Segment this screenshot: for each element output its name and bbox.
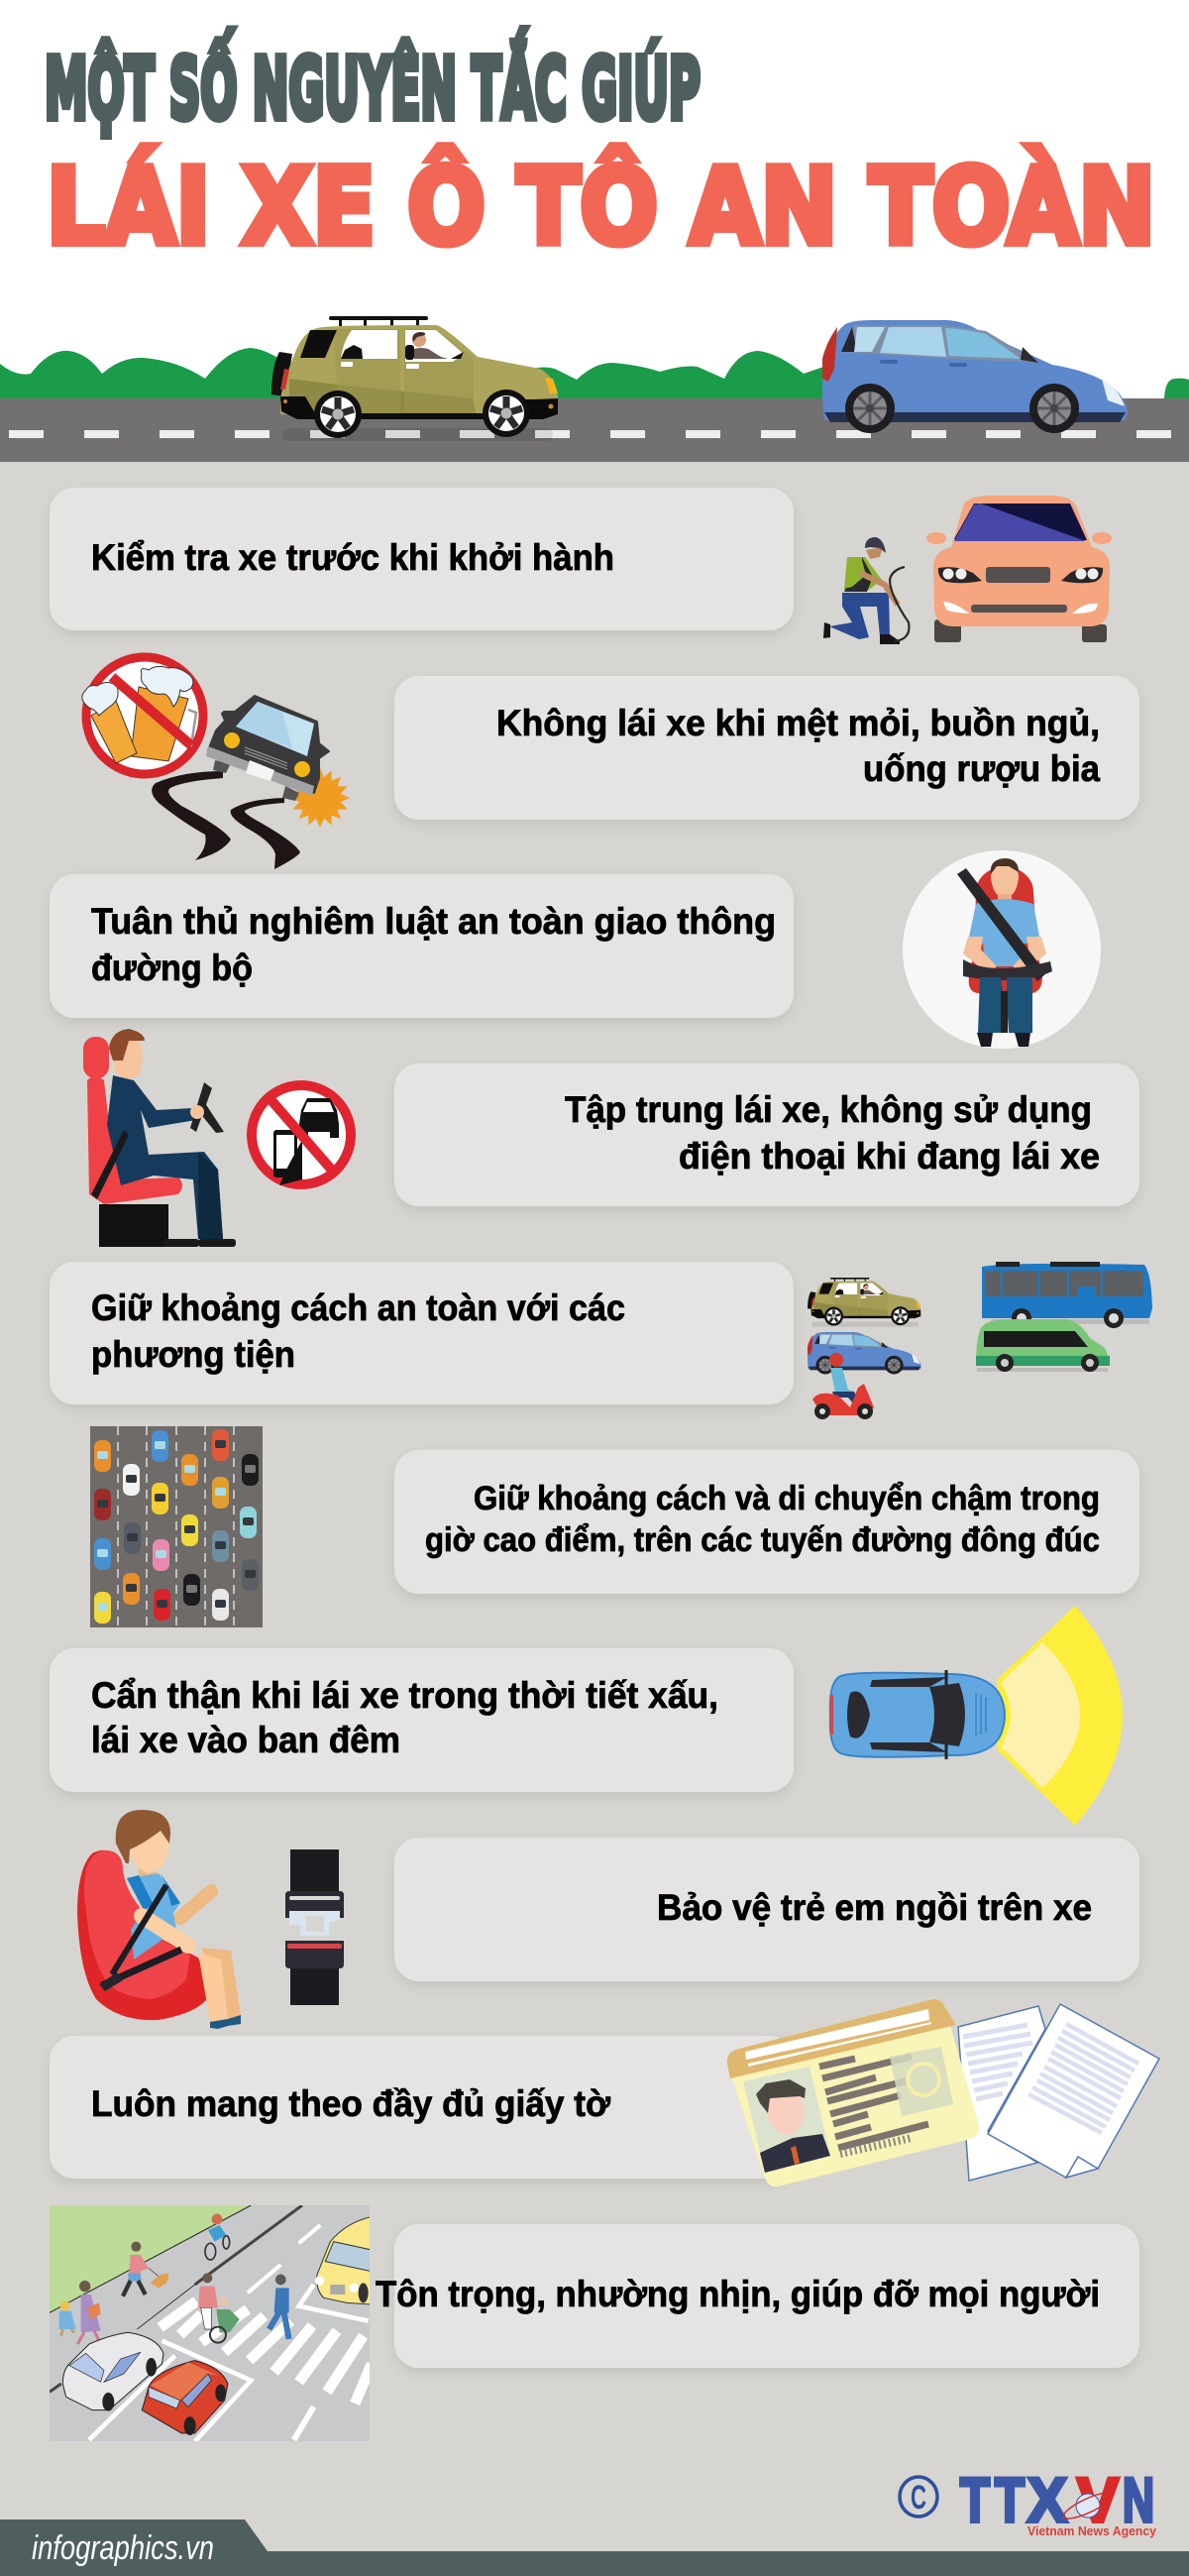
front arm (142, 1916, 188, 1946)
panel: carry documents (50, 2036, 794, 2179)
skidding car (206, 696, 329, 801)
text: Giữ khoảng cách và di chuyển chậm trong (474, 1480, 1100, 1517)
bus (982, 1262, 1152, 1328)
panel: respect others (394, 2224, 1139, 2368)
head (139, 1866, 156, 1880)
icon: no beer and skidding car (82, 657, 350, 869)
text: Tập trung lái xe, không sử dụng (565, 1089, 1092, 1130)
copyright mark (900, 2477, 937, 2517)
prohibition sign with beer (82, 657, 203, 774)
wordmark (960, 2466, 1154, 2535)
impact star (290, 768, 350, 828)
footer band (0, 2520, 1189, 2576)
scene: road with hills and cars (0, 316, 1189, 462)
panel: check car (50, 488, 794, 630)
people (58, 2214, 289, 2344)
beam (997, 1606, 1123, 1826)
mini olive car (808, 1278, 920, 1327)
skid marks (152, 771, 300, 869)
shirt (127, 1873, 180, 1960)
text: Giữ khoảng cách an toàn với các (91, 1288, 625, 1328)
card (50, 1648, 794, 1792)
icon: traffic jam from above (90, 1426, 263, 1627)
buckle (285, 1849, 344, 2005)
panel: rush hour: giờ cao điểm, trên các tuyến đường đông đúc (425, 1521, 1100, 1559)
card (394, 1838, 1139, 1981)
back arm (180, 1891, 211, 1918)
icon: group of vehicles (808, 1262, 1152, 1419)
icon: driver in seat (83, 1029, 236, 1247)
card (50, 488, 794, 630)
panel: keep distance: phương tiện (91, 1334, 295, 1375)
icon: car with headlight beam (830, 1606, 1123, 1826)
green van (976, 1319, 1110, 1372)
wordmark: X (1027, 2466, 1067, 2535)
road dashes (9, 430, 1171, 438)
logo: TTXVN: C (911, 2479, 926, 2517)
text: Không lái xe khi mệt mỏi, buồn ngủ, (496, 703, 1100, 743)
card (394, 1450, 1139, 1594)
panel: rush hour (394, 1450, 1139, 1594)
orange car (926, 496, 1112, 642)
footer site name: infographics.vn (32, 2529, 214, 2567)
panel: no drunk or tired driving (394, 676, 1139, 820)
icon: mechanic and car (823, 496, 1112, 644)
card (394, 2224, 1139, 2368)
top-view car (830, 1673, 1005, 1757)
yellow bus (315, 2217, 372, 2304)
wordmark: T (960, 2466, 990, 2535)
panel: bad weather and night: lái xe vào ban đêm (91, 1720, 400, 1760)
mechanic (823, 537, 909, 644)
panel: focus on driving (394, 1064, 1139, 1206)
panel: protect children (394, 1838, 1139, 1981)
text: respect others: Tôn trọng, nhường nhịn, giúp đỡ mọi người (376, 2274, 1100, 2314)
silver car (62, 2332, 163, 2411)
card (50, 874, 794, 1018)
card (50, 1262, 794, 1404)
blue car (822, 320, 1128, 433)
globe (1076, 2494, 1100, 2518)
red car (142, 2361, 228, 2435)
icon: crosswalk street scene (50, 2205, 372, 2443)
icon: no phone sign (252, 1085, 351, 1185)
mini blue car (808, 1332, 921, 1375)
card (394, 676, 1139, 820)
seat (77, 1850, 207, 2020)
scooter rider (812, 1353, 874, 1419)
icon: documents (727, 1999, 1159, 2186)
text: Luôn mang theo đầy đủ giấy tờ (91, 2083, 611, 2124)
tagline: Vietnam News Agency (1027, 2523, 1157, 2538)
panel: obey traffic law (50, 874, 794, 1018)
panel: keep distance (50, 1262, 794, 1404)
wordmark: V (1077, 2466, 1119, 2535)
licence card (727, 1999, 979, 2186)
papers (958, 2004, 1159, 2181)
wordmark: T (995, 2466, 1025, 2535)
olive car (271, 316, 558, 441)
text: Tuân thủ nghiêm luật an toàn giao thông (91, 901, 776, 942)
panel: obey traffic law: đường bộ (91, 948, 253, 988)
panel: no drunk or tired driving: uống rượu bia (863, 748, 1100, 789)
road (0, 398, 1189, 462)
card (50, 2036, 794, 2179)
logo: TTXVN (900, 2466, 1157, 2538)
straps (112, 1885, 166, 1974)
text: Cẩn thận khi lái xe trong thời tiết xấu, (91, 1675, 718, 1716)
card (394, 1064, 1139, 1206)
wordmark: N (1123, 2466, 1154, 2535)
legs (201, 1948, 241, 2019)
panel: focus on driving: điện thoại khi đang lái xe (679, 1136, 1100, 1176)
icon: man with seat belt (903, 850, 1101, 1049)
panel: bad weather and night (50, 1648, 794, 1792)
hills (0, 348, 1189, 398)
icon: child in car seat (77, 1810, 344, 2029)
header background (0, 0, 1189, 462)
zebra stripes (89, 2225, 372, 2441)
text: Kiểm tra xe trước khi khởi hành (91, 537, 614, 578)
text: Bảo vệ trẻ em ngồi trên xe (657, 1887, 1092, 1928)
